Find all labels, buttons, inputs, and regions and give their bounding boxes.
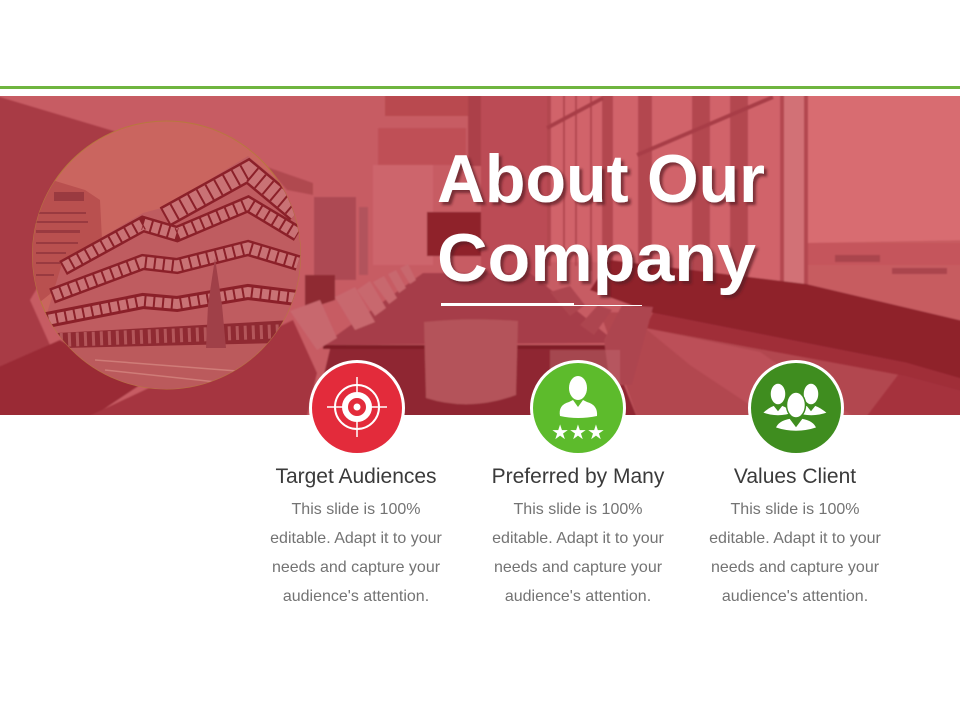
column: preferred by many: This slide is 100% <box>514 501 642 518</box>
distant tower <box>32 181 102 302</box>
column: target audiences: Target Audiences <box>275 465 437 488</box>
long dark bench <box>590 260 960 384</box>
column: target audiences: audience's attention. <box>283 588 429 605</box>
column: preferred by many: editable. Adapt it to your <box>492 530 664 547</box>
back wall details <box>385 96 468 116</box>
ground floor band <box>57 320 293 348</box>
column: target audiences: needs and capture your <box>272 559 440 576</box>
boardroom table <box>323 273 617 345</box>
chairs right <box>550 286 653 385</box>
icon: client group <box>750 362 842 454</box>
column: values client: audience's attention. <box>722 588 868 605</box>
street <box>70 346 265 389</box>
icon: preferred person with stars <box>532 362 624 454</box>
column: target audiences <box>270 465 442 605</box>
column: values client: editable. Adapt it to your <box>709 530 881 547</box>
column: preferred by many: Preferred by Many <box>492 465 664 488</box>
column: values client: needs and capture your <box>711 559 879 576</box>
front chair <box>424 319 518 404</box>
column: target audiences: editable. Adapt it to your <box>270 530 442 547</box>
column: values client <box>709 465 881 605</box>
column: target audiences: This slide is 100% <box>292 501 420 518</box>
chairs left <box>290 264 416 350</box>
left dark wall <box>0 91 117 375</box>
title underline <box>441 303 642 306</box>
column: preferred by many: needs and capture your <box>494 559 662 576</box>
icon: target <box>310 362 404 454</box>
title: About Our <box>437 141 765 217</box>
wall screen <box>426 212 482 256</box>
building mass <box>45 156 302 348</box>
banner photo: boardroom with red tint <box>0 96 960 415</box>
top green rule <box>0 86 960 89</box>
floor <box>604 312 898 415</box>
circular photo: office building <box>30 121 305 400</box>
window wall <box>552 96 780 280</box>
column: values client: This slide is 100% <box>731 501 859 518</box>
window mullions <box>546 96 808 285</box>
icon: preferred person with stars: ★★★ <box>551 420 605 444</box>
tree <box>206 258 226 348</box>
window bands <box>47 171 298 320</box>
column: preferred by many: audience's attention. <box>505 588 651 605</box>
title: Company <box>437 220 756 296</box>
title <box>437 141 765 296</box>
column: values client: Values Client <box>734 465 856 488</box>
column: preferred by many <box>492 465 664 605</box>
doors <box>314 197 356 280</box>
